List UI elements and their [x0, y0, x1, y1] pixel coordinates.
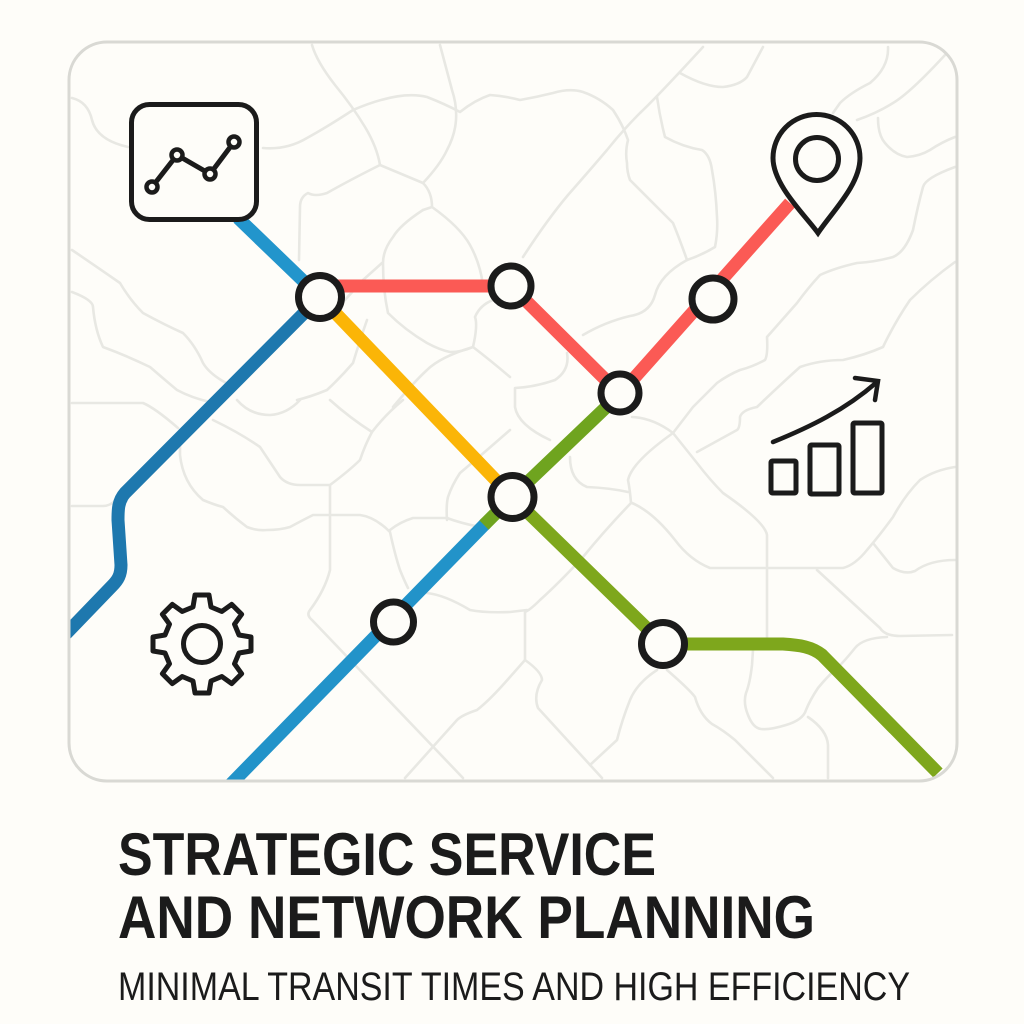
transit lines: [60, 203, 938, 785]
title: [118, 821, 815, 951]
station: [692, 278, 734, 320]
title: STRATEGIC SERVICE: [118, 821, 656, 888]
icon: rising bar chart: [771, 378, 882, 494]
icon: gear: [153, 595, 251, 693]
line: upper blue: [234, 219, 307, 285]
panel background: [69, 42, 957, 781]
station markers: [298, 266, 734, 666]
station: [374, 602, 414, 642]
line: red route: [320, 203, 790, 394]
station: [491, 266, 531, 306]
station: [642, 622, 684, 666]
icon: line chart: [132, 104, 256, 220]
line: green to terminus: [512, 497, 938, 773]
station: [601, 374, 639, 412]
line: yellow: [332, 310, 500, 484]
panel border: [69, 42, 957, 781]
station: [298, 276, 342, 318]
background street map: [72, 45, 955, 778]
line: green short link: [484, 394, 620, 525]
title: AND NETWORK PLANNING: [118, 884, 815, 951]
panel: transit map: [60, 42, 957, 785]
icon: location pin: [773, 114, 860, 233]
subtitle: MINIMAL TRANSIT TIMES AND HIGH EFFICIENCY: [118, 965, 910, 1009]
line: lower-left blue: [70, 310, 308, 638]
line: bottom blue: [230, 523, 486, 785]
station: [491, 476, 534, 518]
